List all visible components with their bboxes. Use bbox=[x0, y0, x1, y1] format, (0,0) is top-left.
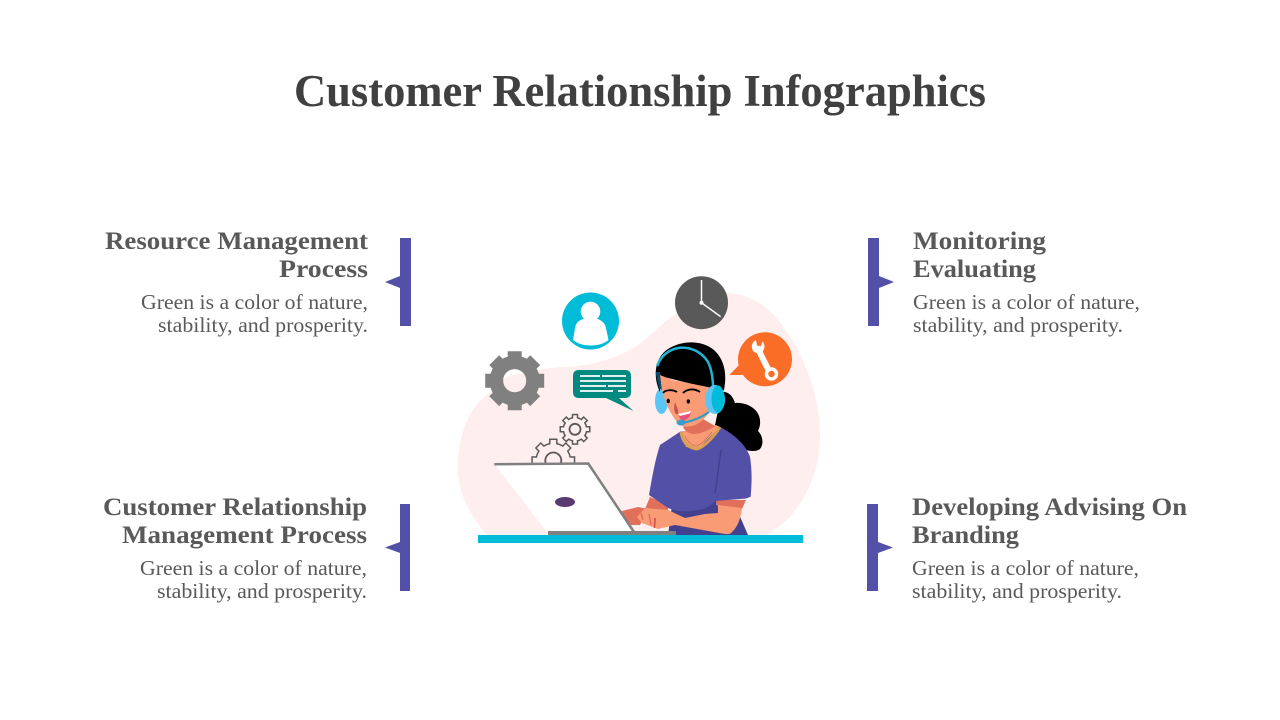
brows bbox=[663, 389, 700, 393]
ponytail bbox=[715, 392, 762, 451]
illustration: customer support agent bbox=[458, 276, 820, 543]
sleeve fold bbox=[715, 450, 721, 493]
chest bbox=[681, 425, 720, 449]
heading: customer relationship management process bbox=[103, 492, 367, 549]
text block: customer relationship description: Green is a color of nature, bbox=[140, 556, 367, 580]
lower torso bbox=[668, 505, 748, 535]
neck shadow bbox=[683, 419, 715, 434]
heading: developing advising on branding: Branding bbox=[912, 520, 1019, 549]
text block: monitoring description: Green is a color of nature, bbox=[913, 290, 1140, 314]
panel: customer relationship management process bbox=[103, 492, 410, 603]
marker: right-pointing bar bbox=[868, 238, 894, 326]
heading: resource management process: Process bbox=[279, 254, 368, 283]
finger lines bbox=[641, 513, 651, 525]
left cuff bbox=[645, 497, 668, 510]
heading: monitoring evaluating: Evaluating bbox=[913, 254, 1036, 283]
marker: right-pointing bar bbox=[867, 504, 893, 591]
text block: monitoring description bbox=[913, 290, 1140, 337]
hair highlight bbox=[656, 372, 662, 390]
agent figure bbox=[618, 342, 762, 535]
icon: chat bubble bbox=[573, 370, 634, 411]
left ear cup bbox=[655, 388, 668, 414]
shirt bbox=[649, 427, 752, 511]
text block: branding description: stability, and prosperity. bbox=[912, 579, 1122, 603]
teeth bbox=[678, 411, 691, 416]
shirt shadow bbox=[692, 500, 717, 513]
heading: resource management process: Resource Management bbox=[105, 226, 369, 255]
microphone arm bbox=[684, 412, 709, 422]
face bbox=[660, 375, 713, 427]
nose bbox=[674, 402, 678, 414]
text block: resource description: Green is a color of nature, bbox=[141, 290, 368, 314]
icon: wrench speech bubble bbox=[729, 332, 792, 386]
icon: gear bbox=[485, 351, 544, 410]
marker: left-pointing bar bbox=[385, 504, 410, 591]
hair bbox=[656, 342, 725, 398]
necklace bbox=[685, 432, 712, 446]
microphone bbox=[676, 420, 686, 426]
marker: left-pointing bar bbox=[385, 238, 411, 326]
text block: resource description: stability, and prosperity. bbox=[158, 313, 368, 337]
right cuff bbox=[715, 500, 746, 509]
desk bar bbox=[478, 535, 803, 543]
finger accent bbox=[654, 518, 656, 528]
panel: monitoring evaluating bbox=[868, 226, 1140, 337]
eyes bbox=[667, 399, 690, 404]
text block: customer relationship description bbox=[140, 556, 367, 603]
right ear cup bbox=[705, 385, 725, 414]
right ear cup inner bbox=[712, 386, 724, 412]
text block: customer relationship description: stability, and prosperity. bbox=[157, 579, 367, 603]
collar bbox=[681, 427, 720, 449]
text block: branding description bbox=[912, 556, 1139, 603]
background blob bbox=[458, 293, 820, 535]
panel: resource management process bbox=[105, 226, 411, 337]
panel: developing advising on branding bbox=[867, 492, 1187, 603]
heading: developing advising on branding bbox=[912, 492, 1187, 549]
text block: resource description bbox=[141, 290, 368, 337]
text block: branding description: Green is a color of nature, bbox=[912, 556, 1139, 580]
icon: person bbox=[562, 292, 619, 350]
text block: monitoring description: stability, and prosperity. bbox=[913, 313, 1123, 337]
icon: small outline gear bbox=[560, 414, 590, 445]
heading: developing advising on branding: Developing Advising On bbox=[912, 492, 1187, 521]
heading: monitoring evaluating: Monitoring bbox=[913, 226, 1046, 255]
laptop bbox=[494, 463, 676, 536]
title: Customer Relationship Infographics bbox=[294, 66, 986, 116]
heading: customer relationship management process: Management Process bbox=[122, 520, 367, 549]
icon: clock bbox=[675, 276, 728, 329]
heading: monitoring evaluating bbox=[913, 226, 1046, 283]
heading: customer relationship management process: Customer Relationship bbox=[103, 492, 367, 521]
arm and hand bbox=[637, 505, 742, 534]
mouth bbox=[678, 411, 691, 421]
heading: resource management process bbox=[105, 226, 369, 283]
headset band bbox=[657, 348, 713, 388]
icon: large outline gear bbox=[531, 438, 575, 482]
left forearm bbox=[618, 507, 648, 525]
